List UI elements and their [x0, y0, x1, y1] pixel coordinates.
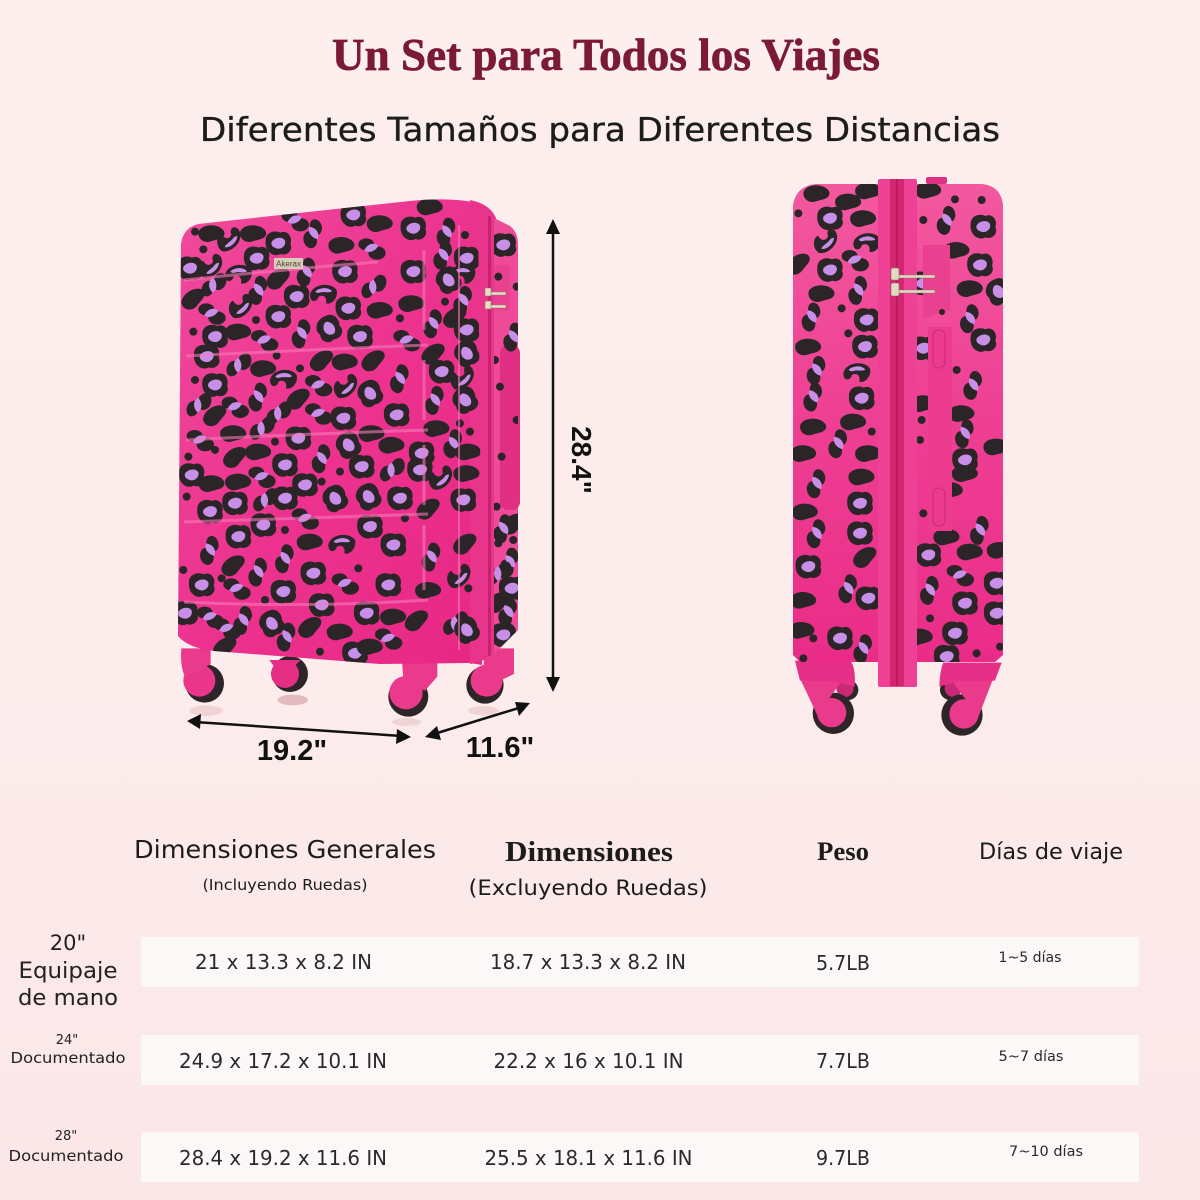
- header: travel days: Días de viaje: [979, 840, 1123, 865]
- row label: Documentado: [10, 1049, 126, 1067]
- subtitle: Diferentes Tamaños para Diferentes Distancias: [200, 110, 1000, 149]
- row label: [18, 931, 118, 1011]
- clasp: [891, 268, 935, 296]
- suitcase front view: [172, 199, 529, 726]
- values: 28.4 x 19.2 x 11.6 IN: [179, 1146, 387, 1170]
- arrow: width: [187, 714, 411, 744]
- leopard spots front: [172, 199, 483, 665]
- side panel: [494, 218, 518, 654]
- brand text: Akerax: [276, 260, 301, 268]
- combination lock: [923, 245, 950, 318]
- leopard spots side panel: [494, 233, 518, 647]
- values: 7.7LB: [816, 1049, 870, 1073]
- header: dimensions excluding wheels: (Excluyendo Ruedas): [468, 876, 708, 900]
- row 24 inch: [10, 1033, 1139, 1085]
- row label: 28": [55, 1129, 77, 1144]
- title: Un Set para Todos los Viajes: [332, 29, 880, 80]
- label: width: 19.2": [257, 735, 327, 767]
- row label: 24": [56, 1033, 78, 1048]
- header: dimensions excluding wheels: [468, 836, 708, 900]
- table headers: [134, 835, 1123, 900]
- values: 21 x 13.3 x 8.2 IN: [195, 950, 372, 974]
- central band and zipper: [878, 179, 917, 687]
- header: weight: Peso: [817, 837, 869, 866]
- label: height: 28.4": [566, 426, 597, 494]
- telescopic handle: [928, 327, 952, 531]
- values: 22.2 x 16 x 10.1 IN: [494, 1049, 684, 1073]
- side wheels: [795, 661, 1002, 736]
- values: 25.5 x 18.1 x 11.6 IN: [484, 1146, 692, 1170]
- values: [179, 1049, 1064, 1073]
- row label: [10, 1033, 126, 1067]
- row label: Documentado: [8, 1147, 124, 1165]
- row 28 inch: [8, 1129, 1139, 1182]
- suitcase side view: [783, 177, 1014, 736]
- arrow: depth: [425, 702, 530, 740]
- side shell: [793, 184, 1003, 662]
- arrow: height: [546, 219, 560, 692]
- values: 5~7 días: [998, 1049, 1064, 1065]
- values: 18.7 x 13.3 x 8.2 IN: [490, 950, 686, 974]
- leopard spots side: [793, 184, 1003, 662]
- values: 9.7LB: [816, 1146, 870, 1170]
- values: 5.7LB: [816, 951, 870, 975]
- header: overall dimensions: (Incluyendo Ruedas): [202, 876, 368, 894]
- row label: [8, 1129, 124, 1165]
- front shell: [178, 199, 482, 665]
- shell ridges and highlights: [184, 225, 459, 650]
- row label: de mano: [18, 986, 118, 1011]
- front wheels: [181, 648, 514, 726]
- label: depth: 11.6": [466, 732, 534, 764]
- zipper band: [470, 200, 496, 664]
- clasp: [485, 288, 506, 309]
- top handle: [926, 177, 947, 184]
- brand label: [274, 258, 303, 269]
- header: dimensions excluding wheels: Dimensiones: [505, 836, 673, 868]
- values: 24.9 x 17.2 x 10.1 IN: [179, 1049, 387, 1073]
- row 20 inch: [18, 931, 1139, 1011]
- values: 7~10 días: [1009, 1144, 1083, 1160]
- values: [195, 950, 1062, 975]
- values: [179, 1144, 1083, 1170]
- header: overall dimensions: [134, 835, 436, 894]
- row label: 20": [50, 931, 86, 955]
- row label: Equipaje: [18, 959, 118, 984]
- side handle: [500, 345, 520, 510]
- values: 1~5 días: [998, 950, 1062, 966]
- header: overall dimensions: Dimensiones Generales: [134, 835, 436, 864]
